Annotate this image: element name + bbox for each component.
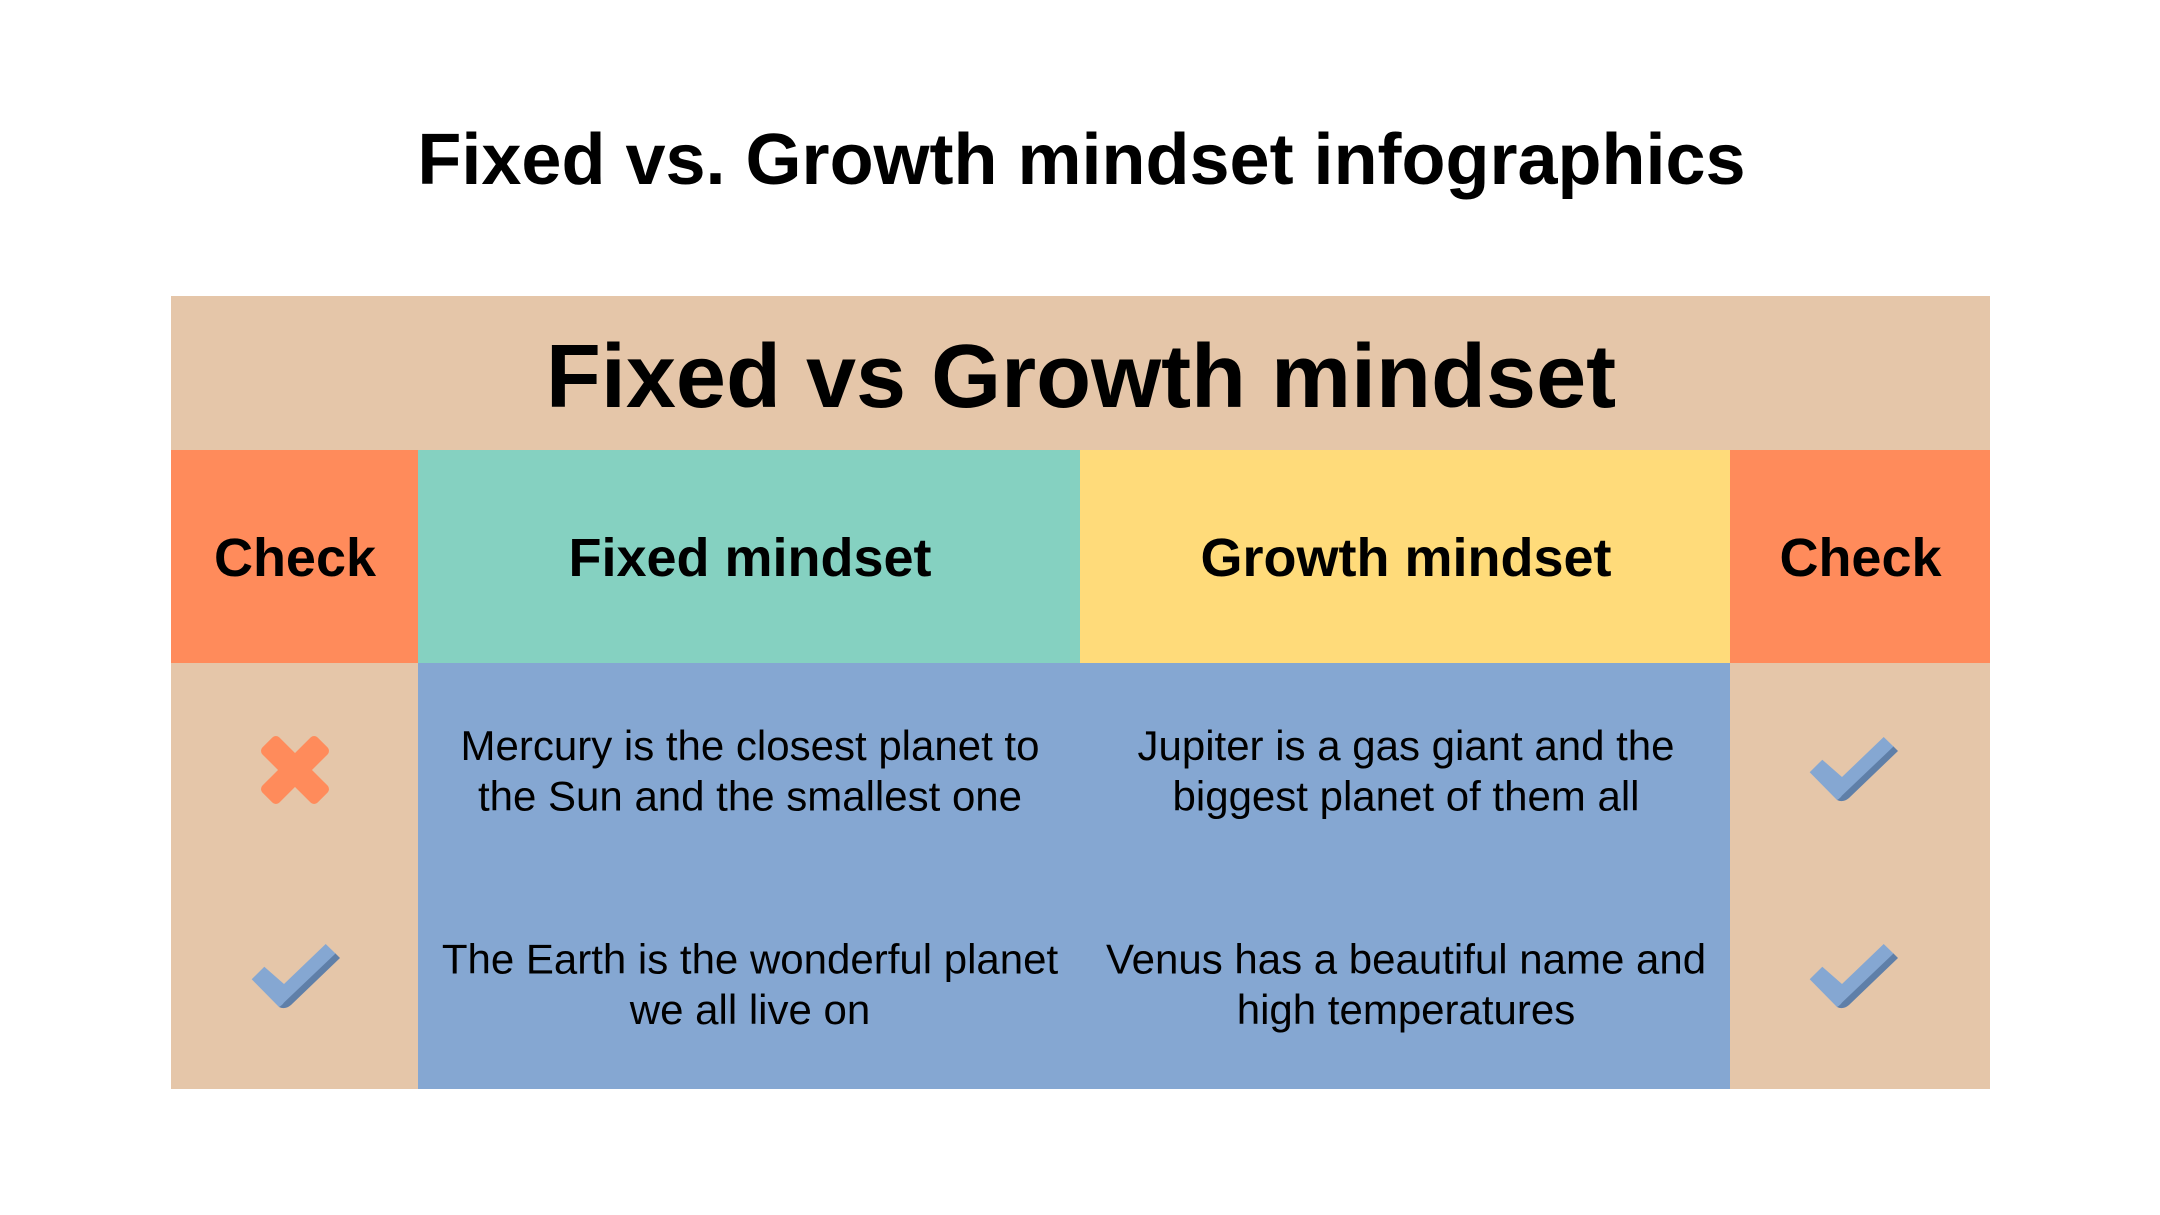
icon: check row 2 left [252, 944, 340, 1008]
table banner: Fixed vs Growth mindset [546, 327, 1616, 427]
right check column [1730, 663, 1990, 1089]
text: mercury: Mercury is the closest planet to [461, 722, 1039, 769]
text: jupiter: Jupiter is a gas giant and the [1137, 722, 1675, 769]
text: mercury: the Sun and the smallest one [478, 772, 1022, 820]
title: Fixed vs. Growth mindset infographics [417, 120, 1746, 200]
column header: growth mindset: Growth mindset [1200, 528, 1612, 588]
table banner [171, 296, 1990, 450]
column header: fixed mindset: Fixed mindset [568, 528, 932, 588]
column header: left check [171, 450, 418, 663]
column header: fixed mindset [418, 450, 1080, 663]
text: venus: high temperatures [1237, 986, 1575, 1033]
column header: right check: Check [1779, 528, 1942, 588]
column header: growth mindset [1080, 450, 1730, 663]
icon: check row 1 right [1810, 737, 1898, 801]
icon: check row 2 right [1810, 944, 1898, 1008]
icon: cross [259, 734, 331, 806]
text: earth: The Earth is the wonderful planet [442, 936, 1059, 982]
body panel [418, 663, 1730, 1089]
text: earth: we all live on [629, 986, 870, 1033]
panel: comparison table [171, 296, 1990, 1089]
text: venus: Venus has a beautiful name and [1106, 936, 1706, 982]
text: jupiter: biggest planet of them all [1173, 772, 1639, 820]
column header: left check: Check [214, 528, 377, 588]
left check column [171, 663, 418, 1089]
column header: right check [1730, 450, 1990, 663]
